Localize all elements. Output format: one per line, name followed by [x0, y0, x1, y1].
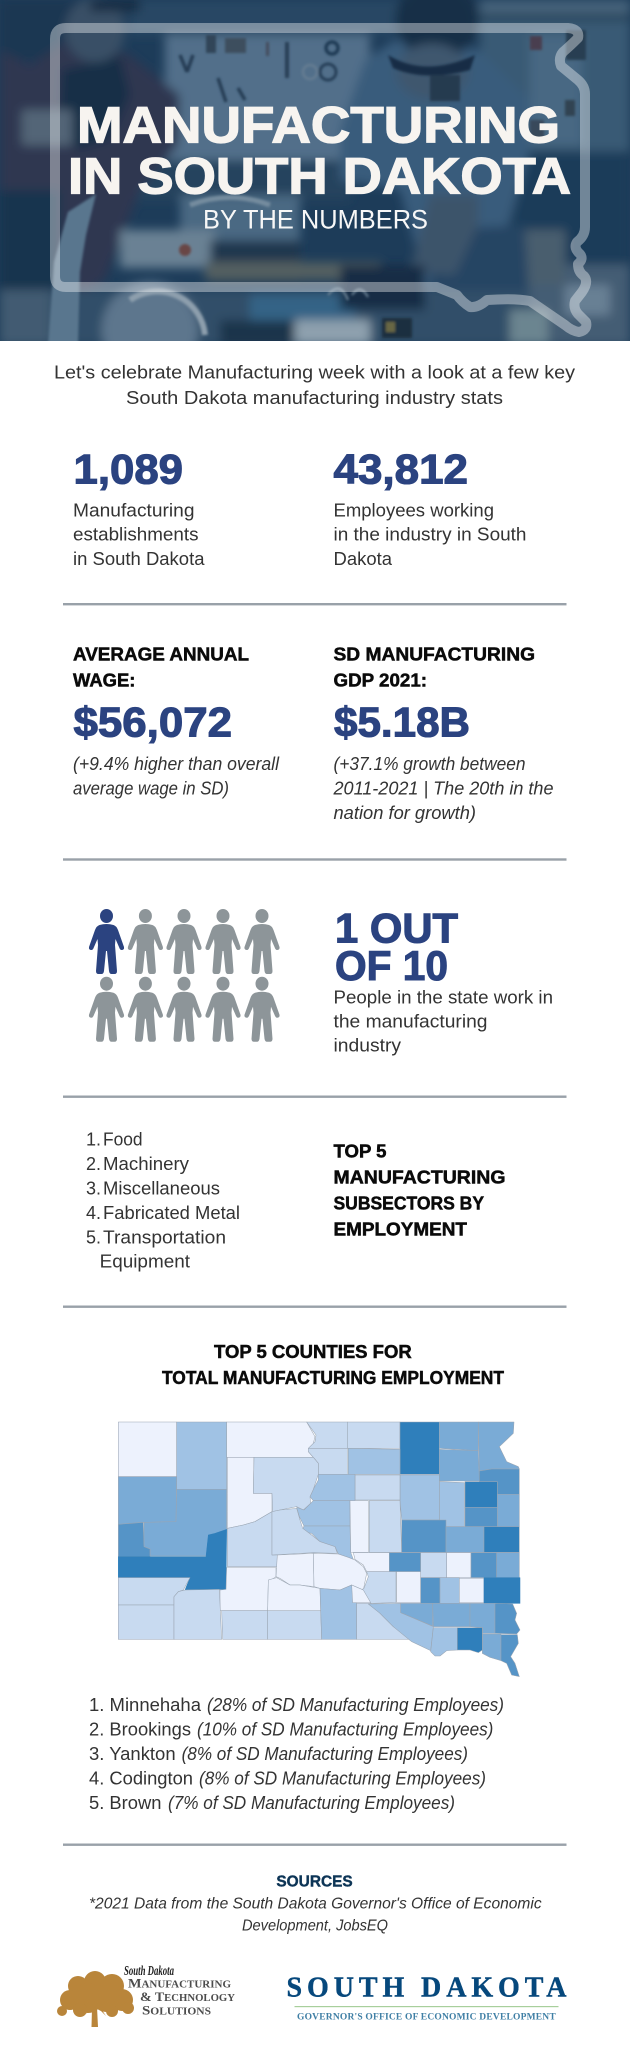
note: nation for growth) — [334, 803, 476, 823]
description — [334, 987, 553, 1056]
heading — [334, 645, 535, 691]
intro text: South Dakota manufacturing industry stats — [126, 388, 503, 408]
list: top 5 counties: 2. Brookings — [89, 1720, 191, 1740]
list: top 5 subsectors: 3. — [86, 1178, 101, 1198]
heading: top 5 subsectors — [334, 1142, 506, 1240]
sources — [89, 1874, 542, 1935]
stat: manufacturing GDP — [332, 645, 554, 823]
heading: SD MANUFACTURING — [334, 645, 535, 665]
wordmark: SOUTH DAKOTA — [286, 1973, 567, 2004]
description: in South Dakota — [73, 549, 206, 569]
subtitle: BY THE NUMBERS — [203, 204, 428, 234]
description: Manufacturing — [73, 501, 194, 521]
number: $56,072 — [74, 699, 232, 746]
script wordmark: South Dakota — [124, 1964, 174, 1979]
list: top 5 counties: 3. Yankton — [89, 1744, 176, 1764]
description: in the industry in South — [334, 525, 526, 545]
heading: top 5 subsectors: EMPLOYMENT — [334, 1220, 467, 1240]
logo: Manufacturing & Technology Solutions — [57, 1964, 236, 2027]
number: 43,812 — [334, 445, 468, 492]
list: top 5 counties: (8% of SD Manufacturing Employees) — [199, 1768, 486, 1788]
description: Dakota — [334, 549, 393, 569]
list: top 5 subsectors: Fabricated Metal — [103, 1203, 240, 1223]
sources text: Development, JobsEQ — [242, 1918, 388, 1935]
logo: South Dakota Governor's Office of Economic Development — [286, 1973, 567, 2022]
sources heading: SOURCES — [276, 1874, 353, 1891]
stat: average annual wage — [73, 645, 280, 798]
list: top 5 subsectors: 4. — [86, 1203, 101, 1223]
hero photo details — [48, 30, 586, 345]
note: (+37.1% growth between — [334, 754, 526, 774]
heading: WAGE: — [73, 671, 135, 691]
heading: top 5 subsectors: TOP 5 — [334, 1142, 386, 1162]
list: top 5 counties: (7% of SD Manufacturing Employees) — [168, 1793, 455, 1813]
title: IN SOUTH DAKOTA — [68, 147, 571, 204]
panel: hero banner — [0, 0, 630, 378]
list: top 5 subsectors: 5. — [86, 1227, 101, 1247]
heading: top 5 subsectors: SUBSECTORS BY — [334, 1194, 484, 1214]
note — [332, 754, 554, 823]
list: top 5 counties: 4. Codington — [89, 1768, 193, 1788]
stat: 1 out of 10 — [334, 904, 553, 1056]
number: OF 10 — [335, 942, 448, 989]
heading: AVERAGE ANNUAL — [73, 645, 249, 665]
list: top 5 subsectors: Equipment — [100, 1252, 190, 1272]
icon: oak tree — [57, 1971, 134, 2027]
heading: top 5 counties: TOTAL MANUFACTURING EMPLOYMENT — [162, 1368, 504, 1388]
map: South Dakota counties choropleth — [118, 1422, 520, 1677]
title — [70, 106, 570, 195]
description: Employees working — [334, 501, 494, 521]
list: top 5 counties: (28% of SD Manufacturing Employees) — [207, 1695, 504, 1715]
heading: top 5 subsectors: MANUFACTURING — [334, 1168, 506, 1188]
list: top 5 counties: (10% of SD Manufacturing Employees) — [197, 1720, 493, 1740]
list: top 5 counties — [89, 1695, 504, 1813]
number: 1 OUT — [335, 904, 458, 951]
logo text: MANUFACTURING — [128, 1976, 231, 1991]
list: top 5 counties: 1. Minnehaha — [89, 1695, 202, 1715]
list: top 5 subsectors: Food — [103, 1130, 143, 1150]
note — [73, 754, 280, 798]
description — [73, 501, 206, 569]
stat: establishments — [73, 445, 206, 569]
list: top 5 subsectors: Transportation — [103, 1227, 226, 1247]
list: top 5 subsectors: 1. — [86, 1130, 101, 1150]
list: top 5 subsectors: Miscellaneous — [103, 1178, 220, 1198]
title: MANUFACTURING — [77, 97, 560, 154]
description: industry — [334, 1036, 401, 1056]
stat: employees — [334, 445, 526, 569]
note: 2011-2021 | The 20th in the — [332, 778, 554, 798]
number: $5.18B — [334, 699, 470, 746]
hero photo background — [0, 0, 630, 378]
heading: top 5 counties — [162, 1342, 504, 1388]
list: top 5 subsectors — [86, 1130, 240, 1272]
logo text: & TECHNOLOGY — [140, 1989, 236, 2004]
heading: GDP 2021: — [334, 671, 427, 691]
number — [335, 904, 458, 989]
logo text: SOLUTIONS — [142, 2002, 211, 2017]
tagline: GOVERNOR'S OFFICE OF ECONOMIC DEVELOPMENT — [297, 2012, 556, 2022]
list: top 5 counties: (8% of SD Manufacturing Employees) — [182, 1744, 468, 1764]
note: (+9.4% higher than overall — [73, 754, 280, 774]
South Dakota state outline — [55, 28, 586, 332]
intro text — [54, 362, 575, 408]
description: People in the state work in — [334, 987, 553, 1007]
list: top 5 subsectors: Machinery — [103, 1154, 189, 1174]
heading — [73, 645, 249, 691]
sources text — [89, 1896, 542, 1935]
note: average wage in SD) — [73, 778, 229, 798]
logo text — [128, 1976, 236, 2017]
list: top 5 subsectors: 2. — [86, 1154, 101, 1174]
sources text: *2021 Data from the South Dakota Governor's Office of Economic — [89, 1896, 542, 1913]
intro text: Let's celebrate Manufacturing week with a look at a few key — [54, 362, 575, 382]
icon: ten people pictogram — [89, 909, 280, 1042]
description: establishments — [73, 525, 198, 545]
list: top 5 counties: 5. Brown — [89, 1793, 162, 1813]
description: the manufacturing — [334, 1012, 488, 1032]
heading: top 5 counties: TOP 5 COUNTIES FOR — [214, 1342, 412, 1362]
description — [334, 501, 526, 569]
number: 1,089 — [74, 445, 183, 492]
